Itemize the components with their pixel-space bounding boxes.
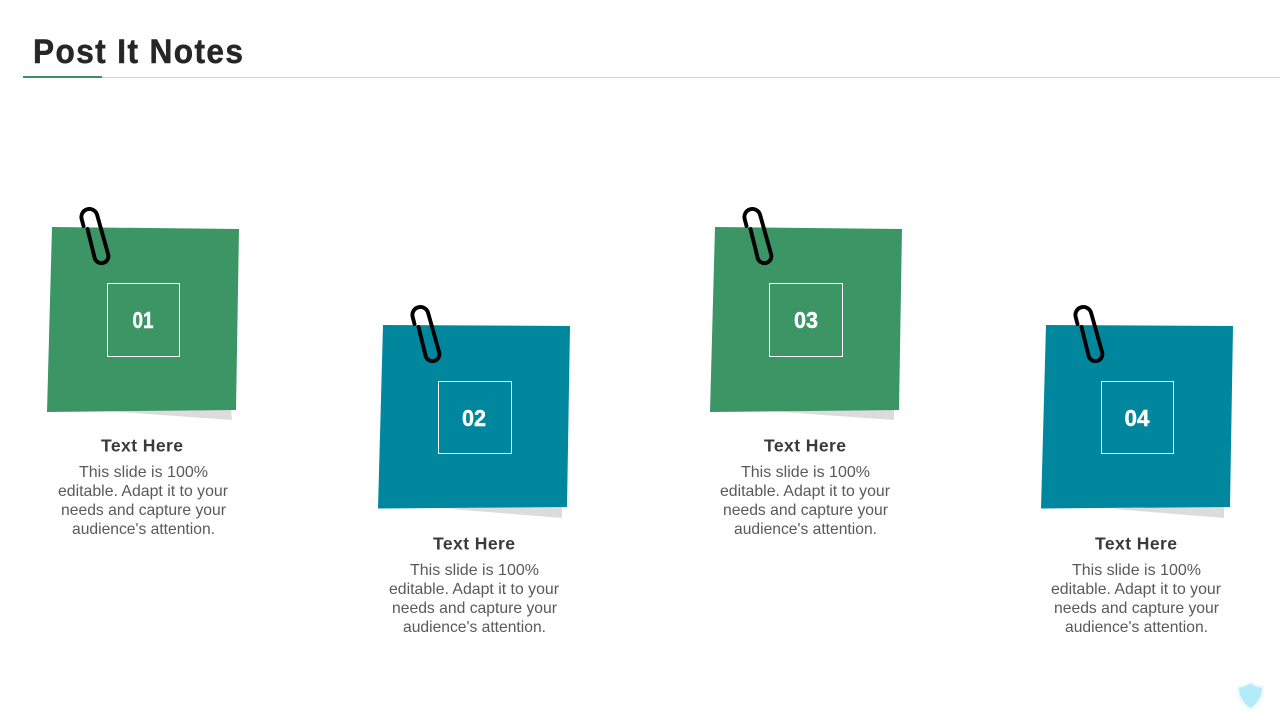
number box: 02 [462, 405, 486, 431]
note square [47, 227, 239, 412]
number box [438, 382, 512, 454]
panel: note 03 [710, 209, 902, 538]
text block: audience's attention. [72, 521, 215, 538]
text block [389, 534, 560, 636]
note shadow [776, 409, 894, 420]
text block: editable. Adapt it to your [1051, 581, 1222, 598]
icon: paperclip [81, 209, 108, 263]
text block: This slide is 100% [410, 562, 539, 579]
panel: note 02 [378, 307, 570, 636]
text block: needs and capture your [61, 502, 227, 519]
note shadow [113, 409, 232, 420]
text block: This slide is 100% [741, 464, 870, 481]
icon: shield [1238, 682, 1263, 710]
text block: audience's attention. [1065, 619, 1208, 636]
text block: needs and capture your [723, 502, 889, 519]
text block: editable. Adapt it to your [720, 483, 891, 500]
note square [710, 227, 902, 412]
text block: Text Here [101, 436, 183, 456]
text block: needs and capture your [392, 600, 558, 617]
text block: editable. Adapt it to your [58, 483, 229, 500]
text block [720, 436, 891, 538]
icon: paperclip [1075, 307, 1102, 361]
text block: needs and capture your [1054, 600, 1220, 617]
text block: audience's attention. [734, 521, 877, 538]
number box: 01 [132, 307, 154, 333]
note square [1041, 325, 1233, 508]
text block: editable. Adapt it to your [389, 581, 560, 598]
text block: This slide is 100% [1072, 562, 1201, 579]
title: Post It Notes [33, 32, 244, 70]
note shadow [444, 506, 562, 518]
icon: paperclip [412, 307, 439, 361]
panel: note 01 [47, 209, 239, 538]
number box: 04 [1124, 405, 1150, 431]
number box [1102, 382, 1174, 454]
icon: paperclip [744, 209, 771, 263]
number box: 03 [794, 307, 818, 333]
header rule [23, 76, 1280, 78]
panel: note 04 [1041, 307, 1233, 636]
text block: Text Here [764, 436, 846, 456]
text block: This slide is 100% [79, 464, 208, 481]
text block: Text Here [433, 534, 515, 554]
number box [108, 284, 180, 356]
note square [378, 325, 570, 508]
text block: Text Here [1095, 534, 1177, 554]
note shadow [1107, 506, 1224, 518]
text block: audience's attention. [403, 619, 546, 636]
number box [770, 284, 842, 356]
text block [1051, 534, 1222, 636]
text block [58, 436, 229, 538]
